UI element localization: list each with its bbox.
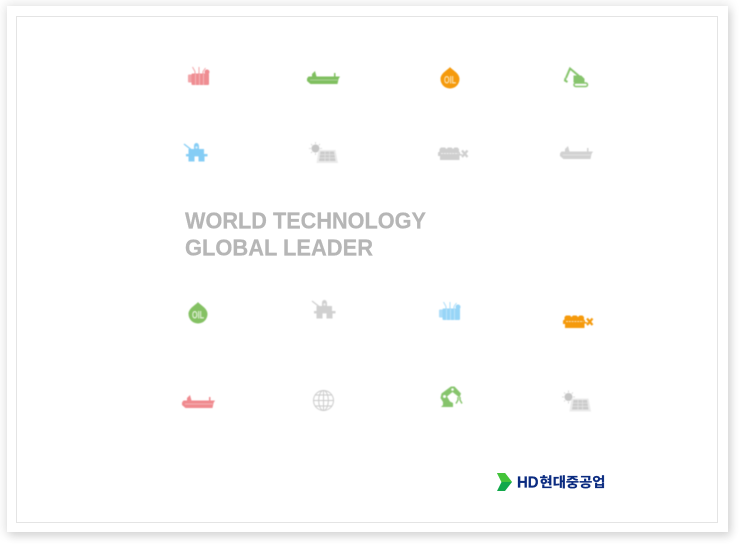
icon: green oil drop [188, 302, 208, 324]
icon: green ship [307, 71, 340, 84]
icon: green oil drop: OIL [192, 310, 204, 322]
title: headline [185, 208, 426, 260]
icon: orange oil drop [440, 67, 460, 88]
icon: orange engine [563, 316, 592, 328]
icon: blue oil rig [184, 143, 208, 162]
icon: red ship [182, 395, 215, 408]
icon: grey globe [314, 390, 334, 410]
logo: HD Hyundai Heavy Industries: 현대중공업 [540, 475, 606, 490]
icon: grey ship [560, 146, 593, 159]
logo: HD Hyundai Heavy Industries: HD [517, 474, 538, 492]
icon: red transformer [188, 67, 210, 85]
title: headline: GLOBAL LEADER [185, 234, 373, 260]
icon: blue transformer [439, 302, 460, 320]
icon: green excavator [565, 68, 588, 86]
logo: HD Hyundai Heavy Industries [497, 473, 606, 492]
icon: grey solar panel [562, 390, 591, 412]
icon: grey oil rig [312, 300, 336, 318]
icon: grey engine [438, 148, 468, 160]
title: headline: WORLD TECHNOLOGY [185, 208, 426, 234]
icon: orange oil drop: OIL [444, 74, 456, 86]
icon: grey solar panel [309, 142, 338, 163]
icon: green robot arm [440, 386, 462, 407]
